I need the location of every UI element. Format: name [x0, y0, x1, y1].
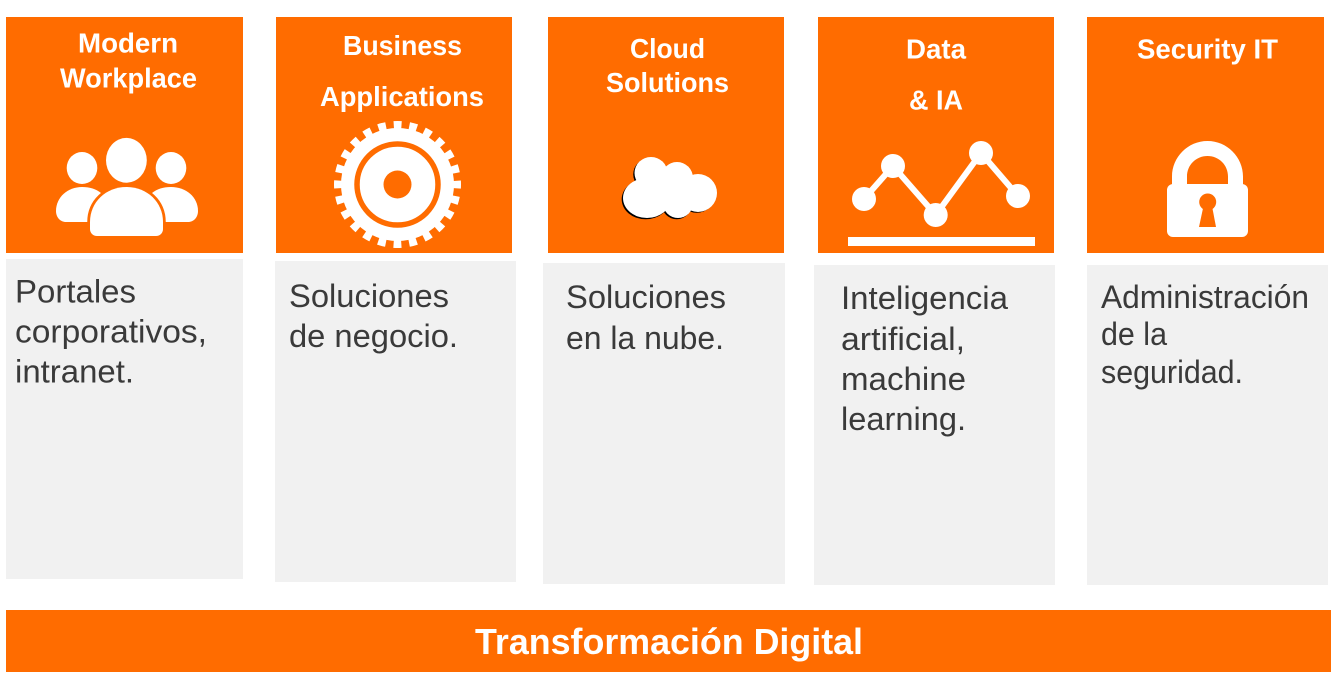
panel: Security IT — [1087, 17, 1328, 585]
heading: Business Applications: Applications — [320, 81, 484, 112]
text: Inteligencia artificial, machine learning. — [841, 280, 1008, 437]
heading: Cloud Solutions: Solutions — [606, 67, 729, 98]
text: Administración de la seguridad. — [1101, 279, 1309, 390]
heading: Data & IA: & IA — [909, 84, 963, 116]
panel: Business Applications — [275, 17, 516, 582]
text: Portales corporativos, intranet.: Portales — [15, 274, 136, 310]
description panel — [275, 261, 516, 582]
text: Inteligencia artificial, machine learning.: machine — [841, 361, 966, 397]
text: Soluciones en la nube. — [566, 279, 726, 356]
text: Soluciones de negocio. — [289, 278, 458, 354]
text: Soluciones en la nube.: Soluciones — [566, 279, 726, 315]
header: Modern Workplace — [6, 17, 243, 253]
text: Administración de la seguridad.: Administración — [1101, 279, 1309, 315]
text: Inteligencia artificial, machine learning.: artificial, — [841, 321, 965, 357]
text: Administración de la seguridad.: de la — [1101, 316, 1167, 352]
banner: Transformación Digital: Transformación Digital — [475, 621, 863, 662]
heading: Business Applications: Business — [343, 30, 462, 61]
banner: Transformación Digital — [6, 610, 1331, 672]
heading: Security IT: Security IT — [1137, 34, 1278, 65]
heading: Data & IA — [906, 34, 967, 116]
text: Inteligencia artificial, machine learning.: learning. — [841, 401, 966, 437]
header: Security IT — [1087, 17, 1324, 253]
text: Administración de la seguridad.: seguridad. — [1101, 354, 1243, 390]
panel: Data & IA — [814, 17, 1055, 585]
text: Portales corporativos, intranet. — [15, 274, 207, 390]
header: Data & IA — [818, 17, 1054, 253]
heading: Cloud Solutions: Cloud — [630, 33, 705, 64]
description panel — [543, 263, 785, 584]
icon: line chart — [848, 141, 1035, 246]
text: Inteligencia artificial, machine learning.: Inteligencia — [841, 280, 1008, 316]
icon: cloud — [622, 157, 717, 219]
text: Portales corporativos, intranet.: intranet. — [15, 354, 134, 390]
icon: padlock — [1167, 141, 1248, 237]
header: Cloud Solutions — [548, 17, 784, 253]
header: Business Applications — [276, 17, 512, 253]
text: Portales corporativos, intranet.: corporativos, — [15, 314, 207, 350]
description panel — [814, 265, 1055, 585]
text: Soluciones en la nube.: en la nube. — [566, 320, 724, 356]
heading: Modern Workplace — [60, 28, 197, 94]
description panel — [1087, 265, 1328, 585]
text: Soluciones de negocio.: de negocio. — [289, 318, 458, 354]
text: Soluciones de negocio.: Soluciones — [289, 278, 449, 314]
description panel — [6, 259, 243, 579]
panel: Modern Workplace — [6, 17, 243, 579]
heading: Cloud Solutions — [606, 33, 729, 98]
icon: people — [56, 138, 198, 236]
heading: Modern Workplace: Modern — [78, 28, 178, 58]
panel: Cloud Solutions — [543, 17, 785, 584]
icon: gear — [338, 126, 456, 244]
heading: Data & IA: Data — [906, 34, 967, 64]
heading: Business Applications — [320, 30, 484, 112]
heading: Modern Workplace: Workplace — [60, 62, 197, 94]
